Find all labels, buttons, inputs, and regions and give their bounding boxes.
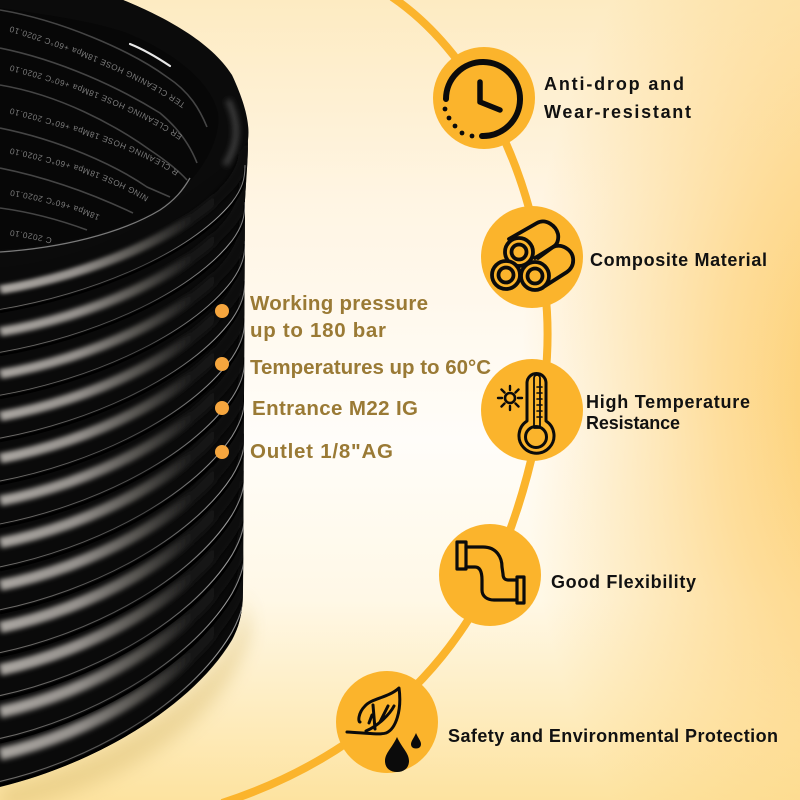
feature: high temperature: High Temperature	[586, 392, 750, 412]
feature: safety and environmental protection	[336, 671, 778, 773]
top rim of coil	[0, 0, 248, 268]
feature: high temperature	[481, 359, 750, 461]
feature: high temperature: Resistance	[586, 413, 680, 433]
specifications list	[215, 292, 491, 463]
rim inner edge line	[0, 178, 190, 252]
spec: temperature: Temperatures up to 60°C	[250, 356, 491, 379]
connecting curved line	[222, 0, 547, 800]
printed hose markings: 18Mpa +60°C 2020.10	[10, 190, 100, 220]
rim highlight	[130, 44, 170, 66]
spec: working pressure: Working pressure	[250, 292, 428, 315]
feature: composite material	[481, 206, 767, 308]
spec: entrance: Entrance M22 IG	[252, 397, 418, 420]
spec: working pressure: up to 180 bar	[250, 319, 386, 342]
inner coil ridges	[0, 10, 207, 230]
feature: good flexibility	[439, 524, 696, 626]
spec: working pressure	[215, 292, 428, 342]
printed hose markings	[10, 26, 184, 244]
feature: good flexibility: Good Flexibility	[551, 572, 696, 592]
feature: safety and environmental protection: Safety and Environmental Protection	[448, 726, 778, 746]
feature: anti-drop: Wear-resistant	[544, 102, 691, 122]
printed hose markings: NING HOSE 18Mpa +60°C 2020.10	[10, 148, 148, 202]
feature: anti-drop: Anti-drop and	[544, 74, 684, 94]
feature: anti-drop	[433, 47, 691, 149]
feature: composite material: Composite Material	[590, 250, 767, 270]
icon: clock	[443, 62, 520, 138]
hose opening interior	[0, 8, 218, 250]
spec: outlet: Outlet 1/8"AG	[250, 440, 393, 463]
icon: pipes	[492, 221, 573, 290]
icon: leaf and water drops	[347, 688, 421, 772]
printed hose markings: ER CLEANING HOSE 18Mpa +60°C 2020.10	[10, 66, 182, 140]
icon: thermometer and sun	[498, 374, 554, 453]
hose coil photo illustration	[0, 0, 256, 800]
printed hose markings: C 2020.10	[10, 230, 52, 244]
icon: bent pipe	[457, 542, 524, 603]
